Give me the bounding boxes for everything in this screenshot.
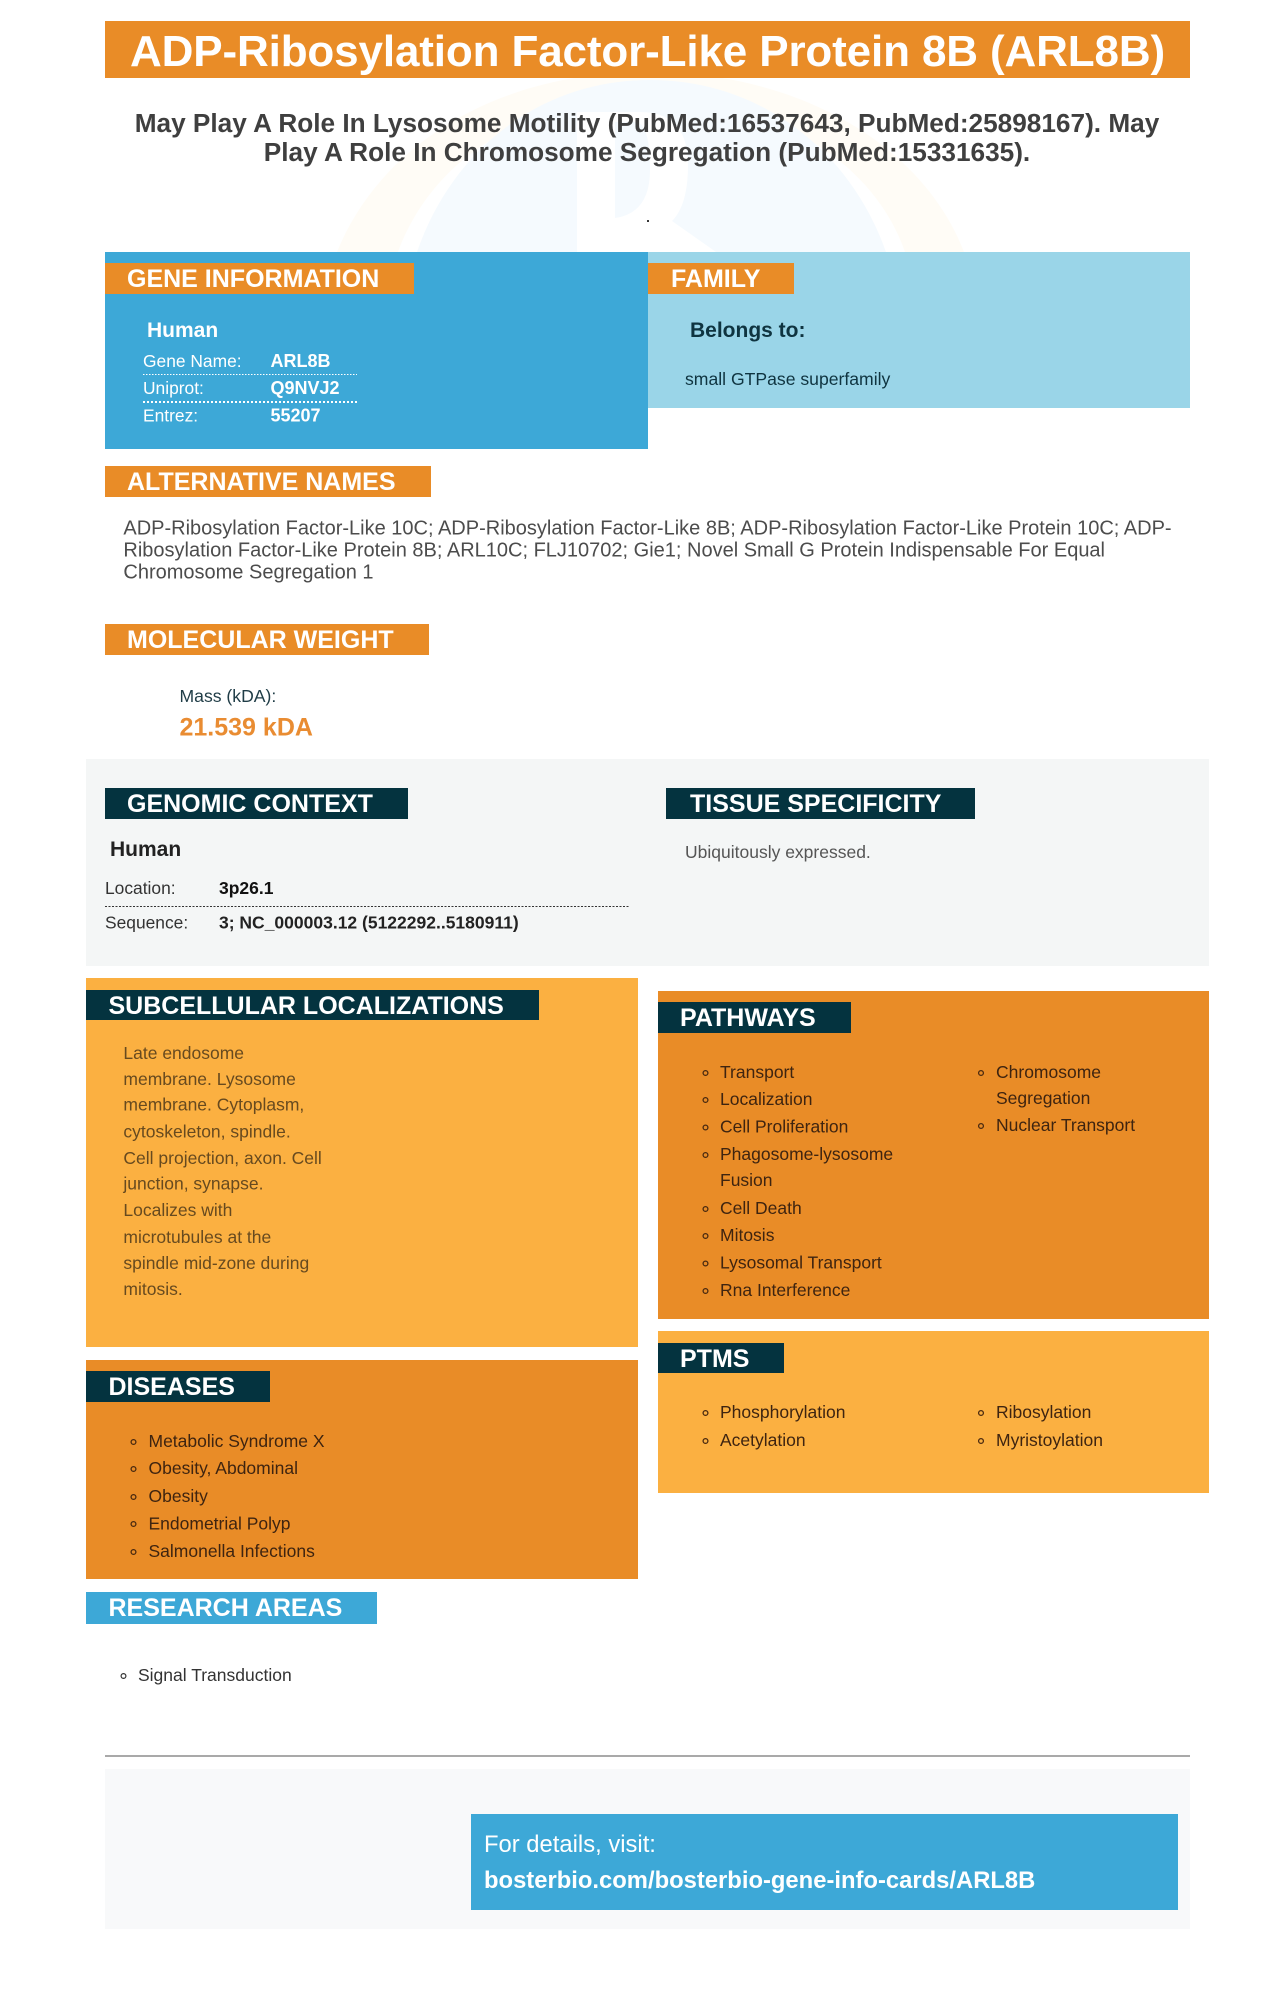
localization text: cytoskeleton, spindle. bbox=[123, 1122, 291, 1142]
heading: diseases: DISEASES bbox=[108, 1373, 235, 1401]
localization text: Cell projection, axon. Cell bbox=[123, 1148, 322, 1168]
diseases list: Obesity bbox=[148, 1486, 208, 1506]
diseases list: Obesity, Abdominal bbox=[148, 1458, 298, 1478]
heading: tissue specificity: TISSUE SPECIFICITY bbox=[690, 790, 942, 818]
mass value: Mass (kDA): bbox=[180, 686, 276, 706]
localization text: spindle mid-zone during bbox=[123, 1253, 309, 1273]
small dot: . bbox=[645, 206, 651, 226]
panel: gene information bbox=[105, 252, 648, 449]
localization text: junction, synapse. bbox=[122, 1174, 263, 1194]
pathways list column 1: Transport bbox=[720, 1062, 794, 1082]
pathways list column 1: Lysosomal Transport bbox=[720, 1253, 882, 1273]
heading: genomic context: GENOMIC CONTEXT bbox=[127, 790, 373, 818]
ptms list: Phosphorylation bbox=[720, 1402, 846, 1422]
alternative names text: Ribosylation Factor-Like Protein 8B; ARL10C; FLJ10702; Gie1; Novel Small G Protein Indispensable For Equal bbox=[123, 540, 1105, 562]
heading: subcellular localizations: SUBCELLULAR LOCALIZATIONS bbox=[108, 992, 504, 1020]
ptms list: Acetylation bbox=[720, 1430, 806, 1450]
localization text: Localizes with bbox=[123, 1200, 232, 1220]
pathways list column 1 bbox=[703, 1062, 893, 1300]
panel: ptms bbox=[658, 1331, 1209, 1493]
panel: subcellular localizations bbox=[86, 978, 638, 1347]
family details bbox=[685, 319, 891, 389]
localization text: Late endosome bbox=[123, 1043, 244, 1063]
panel: alternative names bbox=[105, 466, 1172, 584]
pathways list column 2: Segregation bbox=[996, 1088, 1090, 1108]
panel: genomic context and tissue specificity bbox=[86, 759, 1209, 966]
pathways list column 2: Nuclear Transport bbox=[996, 1115, 1135, 1135]
gene details: ARL8B bbox=[270, 351, 331, 371]
localization text: microtubules at the bbox=[123, 1227, 271, 1247]
panel: family bbox=[648, 252, 1190, 408]
diseases list: Endometrial Polyp bbox=[148, 1513, 291, 1533]
gene details: Entrez: bbox=[143, 406, 198, 426]
pathways list column 1: Mitosis bbox=[720, 1225, 775, 1245]
heading: family bbox=[648, 263, 794, 294]
panel: footer bbox=[105, 1769, 1190, 1929]
subtitle bbox=[135, 108, 1160, 167]
alternative names text: ADP-Ribosylation Factor-Like 10C; ADP-Ribosylation Factor-Like 8B; ADP-Ribosylation Factor-Like Protein 10C; ADP- bbox=[123, 518, 1172, 540]
ptms list bbox=[703, 1402, 1103, 1450]
heading: ptms bbox=[658, 1343, 784, 1373]
genomic details: Human bbox=[110, 838, 181, 861]
panel: pathways bbox=[658, 991, 1209, 1319]
heading: alternative names: ALTERNATIVE NAMES bbox=[127, 468, 396, 496]
heading: pathways bbox=[658, 1002, 851, 1033]
gene details: Human bbox=[147, 319, 218, 342]
subtitle: May Play A Role In Lysosome Motility (PubMed:16537643, PubMed:25898167). May bbox=[135, 108, 1160, 138]
pathways list column 1: Cell Proliferation bbox=[720, 1116, 848, 1136]
pathways list column 1: Rna Interference bbox=[720, 1280, 850, 1300]
callout: details link: bosterbio.com/bosterbio-gene-info-cards/ARL8B bbox=[484, 1867, 1035, 1894]
genomic details: 3; NC_000003.12 (5122292..5180911) bbox=[219, 912, 519, 932]
genomic details: Sequence: bbox=[105, 912, 188, 932]
watermark logo bbox=[337, 72, 964, 252]
gene details: 55207 bbox=[270, 406, 321, 426]
panel: molecular weight bbox=[105, 624, 429, 742]
pathways list column 1: Cell Death bbox=[720, 1198, 802, 1218]
gene details bbox=[143, 319, 357, 426]
genomic details: 3p26.1 bbox=[219, 878, 274, 898]
diseases list: Salmonella Infections bbox=[148, 1541, 315, 1561]
gene details: Gene Name: bbox=[143, 351, 242, 371]
title banner: ADP-Ribosylation Factor-Like Protein 8B (ARL8B) bbox=[130, 27, 1165, 76]
localization text: mitosis. bbox=[123, 1279, 183, 1299]
callout: details link: For details, visit: bbox=[484, 1831, 656, 1858]
subtitle: Play A Role In Chromosome Segregation (PubMed:15331635). bbox=[264, 137, 1030, 167]
pathways list column 2 bbox=[979, 1062, 1135, 1135]
pathways list column 1: Localization bbox=[720, 1089, 812, 1109]
heading: diseases bbox=[86, 1371, 270, 1402]
alternative names text: Chromosome Segregation 1 bbox=[123, 562, 374, 584]
ptms list: Ribosylation bbox=[996, 1402, 1091, 1422]
panel: research areas bbox=[86, 1592, 377, 1685]
family details: small GTPase superfamily bbox=[685, 369, 891, 389]
mass value bbox=[180, 686, 313, 742]
localization text bbox=[122, 1043, 322, 1299]
diseases list: Metabolic Syndrome X bbox=[148, 1431, 325, 1451]
mass value: 21.539 kDA bbox=[180, 714, 313, 742]
gene details: Uniprot: bbox=[143, 378, 204, 398]
diseases list bbox=[131, 1431, 325, 1561]
pathways list column 2: Chromosome bbox=[996, 1062, 1101, 1082]
pathways list column 1: Phagosome-lysosome bbox=[720, 1144, 893, 1164]
heading: family: FAMILY bbox=[671, 265, 761, 293]
pathways list column 1: Fusion bbox=[720, 1170, 773, 1190]
heading: research areas: RESEARCH AREAS bbox=[108, 1594, 342, 1622]
genomic details bbox=[105, 838, 629, 932]
heading: gene information: GENE INFORMATION bbox=[127, 265, 379, 293]
family details: Belongs to: bbox=[690, 319, 806, 342]
ptms list: Myristoylation bbox=[996, 1430, 1103, 1450]
research areas list: Signal Transduction bbox=[138, 1665, 292, 1685]
callout: details link bbox=[471, 1814, 1178, 1910]
localization text: membrane. Lysosome bbox=[123, 1069, 296, 1089]
alternative names text bbox=[123, 518, 1172, 584]
localization text: membrane. Cytoplasm, bbox=[123, 1094, 304, 1114]
heading: ptms: PTMS bbox=[680, 1345, 749, 1373]
panel: diseases bbox=[86, 1360, 638, 1579]
genomic details: Location: bbox=[105, 878, 176, 898]
tissue text: Ubiquitously expressed. bbox=[685, 842, 871, 862]
heading: pathways: PATHWAYS bbox=[680, 1004, 816, 1032]
heading: molecular weight: MOLECULAR WEIGHT bbox=[127, 626, 394, 654]
gene details: Q9NVJ2 bbox=[270, 378, 340, 398]
